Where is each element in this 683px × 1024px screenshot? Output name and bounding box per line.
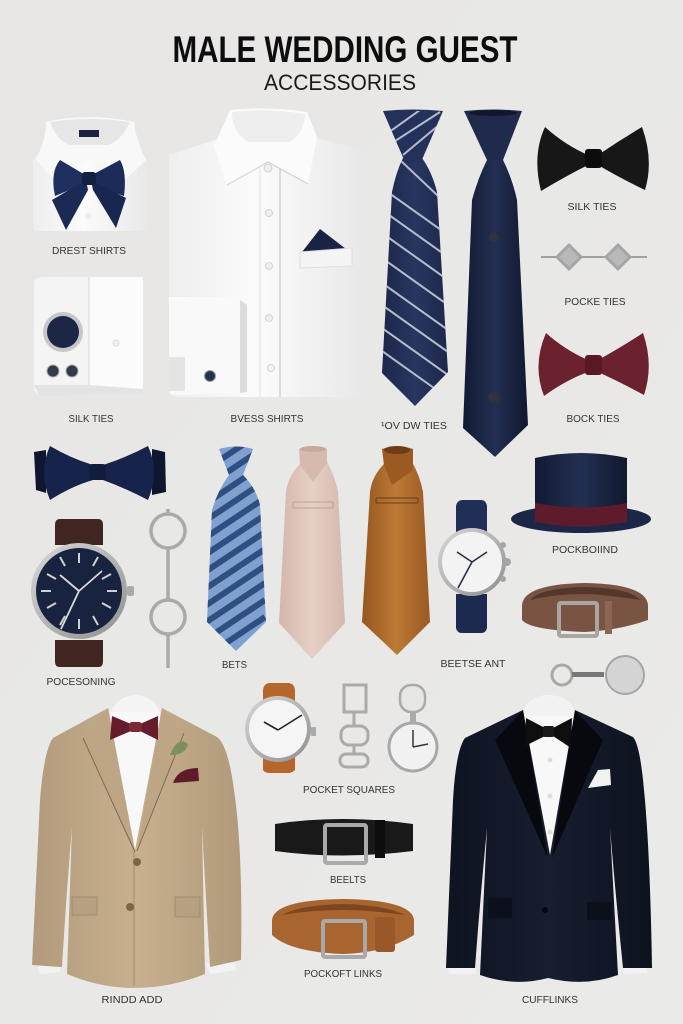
pocket square — [588, 769, 611, 788]
silver chain links — [151, 509, 185, 668]
tie pin — [541, 245, 647, 269]
label: bow ties: ¹OV DW TIES — [381, 420, 447, 432]
black bow tie — [525, 718, 572, 748]
blue striped tie — [207, 446, 266, 651]
subtitle: ACCESSORIES — [264, 70, 416, 95]
label: silk ties left: SILK TIES — [68, 413, 114, 425]
label: pocket ties: POCKE TIES — [564, 296, 626, 308]
copper satin tie — [362, 446, 430, 655]
white dial watch navy strap — [438, 500, 511, 633]
plain navy tie — [463, 110, 528, 457]
steel watch with tan strap — [245, 683, 316, 773]
label: bock ties: BOCK TIES — [566, 413, 620, 425]
dress shirt collar with navy bow tie — [33, 117, 147, 231]
silver buckle links — [340, 685, 368, 767]
tan blazer outfit — [32, 695, 241, 988]
title: MALE WEDDING GUEST — [172, 29, 518, 70]
tan belt — [272, 899, 414, 957]
label: cufflinks: CUFFLINKS — [522, 994, 578, 1006]
navy wide bow tie — [34, 446, 166, 500]
black bow tie — [537, 127, 649, 191]
pocket square — [173, 768, 199, 783]
pocket square — [302, 229, 346, 252]
label: bets: BETS — [222, 659, 247, 671]
cuff with watch and cufflinks — [34, 277, 143, 396]
navy tuxedo outfit — [446, 695, 652, 982]
brown belt — [522, 583, 648, 636]
boutonniere — [170, 741, 188, 755]
label: silk ties: SILK TIES — [568, 201, 616, 213]
navy dial wrist watch — [31, 519, 134, 667]
navy top hat — [511, 453, 651, 533]
burgundy bow tie — [538, 333, 649, 396]
black bow tie knot — [585, 149, 602, 168]
label: beetse ant: BEETSE ANT — [440, 658, 506, 670]
folded cuff with cufflink — [169, 297, 240, 395]
label: belts: BEELTS — [330, 874, 366, 886]
label: pocket links: POCKOFT LINKS — [304, 968, 382, 980]
label: rindd add: RINDD ADD — [102, 994, 163, 1006]
label: pocket round: POCKBOIIND — [552, 544, 618, 556]
label: pocket sewing: POCESONING — [46, 676, 116, 688]
pocket watch and key ring — [552, 656, 644, 694]
striped silk tie — [382, 110, 448, 406]
burgundy bow tie — [110, 716, 158, 740]
blush pink tie — [279, 446, 345, 659]
black belt — [275, 819, 413, 863]
label: pocket squares: POCKET SQUARES — [303, 784, 395, 796]
pocket watch — [389, 685, 437, 771]
label: dress shirts: DREST SHIRTS — [52, 245, 126, 257]
large white dress shirt — [169, 108, 363, 397]
label: shirts: BVESS SHIRTS — [230, 413, 304, 425]
